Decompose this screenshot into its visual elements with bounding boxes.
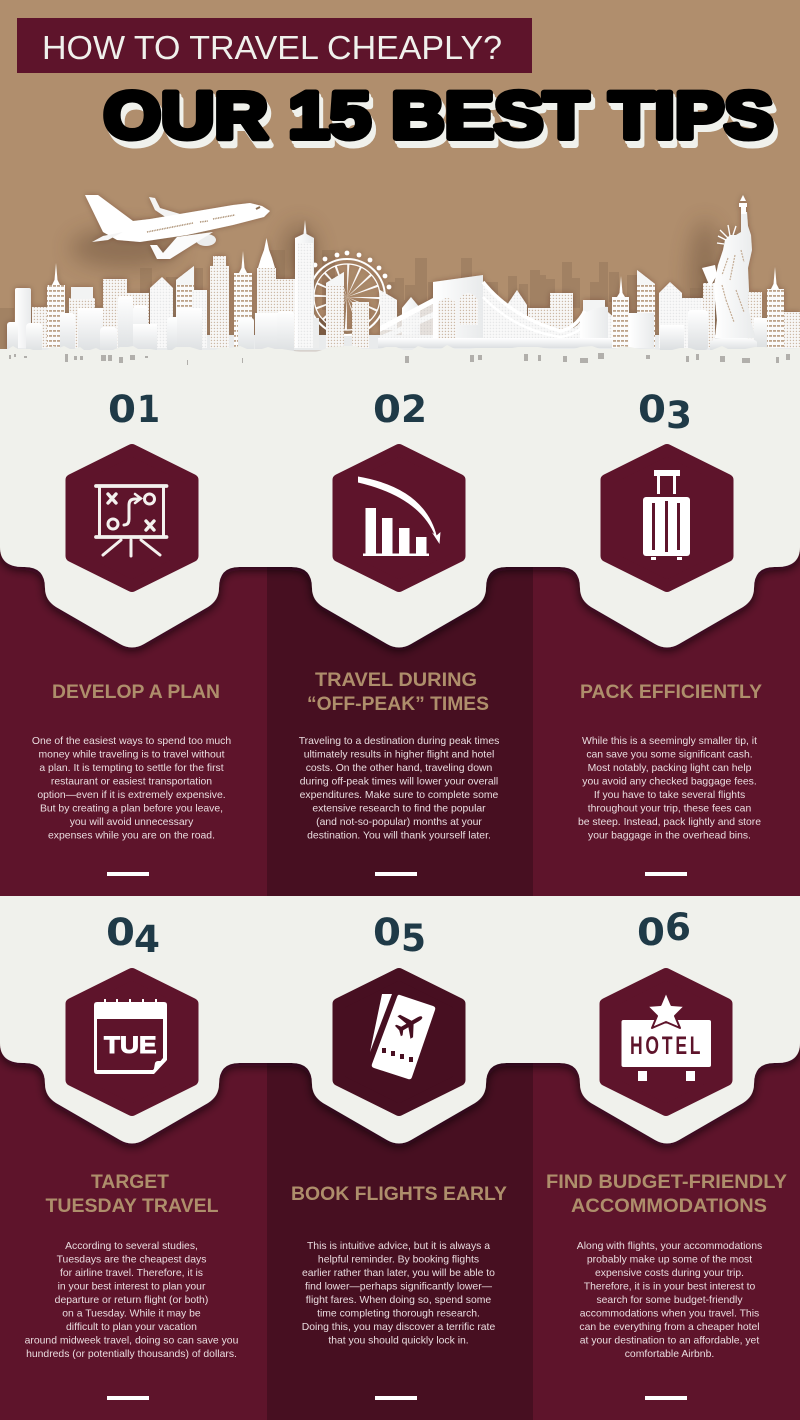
bridge xyxy=(378,275,634,348)
mid towers xyxy=(295,220,605,348)
divider bar xyxy=(645,872,687,876)
panel: light band row 1 with notches xyxy=(0,350,800,648)
title banner xyxy=(17,18,532,73)
body text: option—even if it is extremely expensive. xyxy=(37,790,226,801)
number 01: 0 xyxy=(108,388,136,431)
body text xyxy=(299,736,499,842)
tip 06 xyxy=(546,906,787,1400)
body text: at your destination to an affordable, yet xyxy=(580,1336,759,1346)
icon: calendar xyxy=(94,999,167,1074)
icon: falling prices chart xyxy=(358,476,440,556)
number 02 xyxy=(373,388,427,431)
houses row xyxy=(0,345,800,365)
number 04 xyxy=(106,911,160,961)
divider bar xyxy=(107,872,149,876)
hexagon 01 xyxy=(72,450,192,586)
body text: flight fares. When doing so, spend some xyxy=(306,1295,491,1306)
back towers left xyxy=(7,238,800,350)
body text xyxy=(25,1241,239,1360)
body text: in your best interest to plan your xyxy=(58,1282,206,1292)
main heading: OUR 15 BEST TIPS xyxy=(106,82,775,156)
body text: find lower—perhaps significantly lower— xyxy=(305,1282,493,1292)
heading: DEVELOP A PLAN xyxy=(52,682,220,703)
heading: TRAVEL DURING xyxy=(315,670,477,691)
body text: Most notably, packing light can help xyxy=(588,763,752,774)
divider bar xyxy=(375,1396,417,1400)
tip 01 xyxy=(32,388,231,876)
icon: hotel sign xyxy=(622,992,711,1081)
number 06 xyxy=(637,906,691,954)
divider bar xyxy=(375,872,417,876)
body text: earlier rather than later, you will be able to xyxy=(302,1268,495,1279)
body text: expenses while you are on the road. xyxy=(48,830,215,842)
body text: Along with flights, your accommodations xyxy=(577,1241,762,1252)
body text xyxy=(32,736,231,842)
background soft shadows xyxy=(70,220,721,340)
hexagon 05 xyxy=(338,974,460,1110)
heading: BOOK FLIGHTS EARLY xyxy=(291,1184,507,1205)
body text: search for some budget-friendly xyxy=(596,1295,743,1306)
right towers xyxy=(612,267,800,348)
body text: can save you some significant cash. xyxy=(586,750,753,760)
number 03: 3 xyxy=(666,394,692,437)
body text: costs. On the other hand, traveling down xyxy=(306,763,492,774)
number 05: 0 xyxy=(373,911,401,954)
heading: PACK EFFICIENTLY xyxy=(580,682,762,703)
header background xyxy=(0,0,800,362)
number 06: 0 xyxy=(637,911,665,954)
icon: suitcase xyxy=(643,470,690,560)
tip 03 xyxy=(578,388,762,876)
main heading: OUR 15 BEST TIPS xyxy=(108,85,777,159)
panel: light band row 2 with notches xyxy=(0,1030,800,1152)
body text: Therefore, it is in your best interest to xyxy=(584,1282,755,1292)
body text: Doing this, you may discover a terrific rate xyxy=(302,1322,495,1333)
body text: While this is a seemingly smaller tip, it xyxy=(582,736,757,747)
body text: helpful reminder. By booking flights xyxy=(318,1254,479,1266)
hexagon 03 xyxy=(606,450,728,586)
ferris wheel xyxy=(309,251,391,335)
body text: This is intuitive advice, but it is always a xyxy=(307,1241,490,1252)
body text: probably make up some of the most xyxy=(587,1254,752,1266)
body text: difficult to plan your vacation xyxy=(66,1322,197,1333)
heading: TARGET xyxy=(91,1172,169,1193)
heading xyxy=(46,1172,219,1217)
wheel backing shade xyxy=(318,318,342,346)
body text: destination. You will thank yourself later. xyxy=(307,830,491,842)
airplane xyxy=(85,195,270,259)
tip 05 xyxy=(291,911,507,1400)
icon: strategy board xyxy=(96,486,166,556)
house windows xyxy=(9,353,790,365)
body text: that you should quickly lock in. xyxy=(328,1336,469,1346)
heading: “OFF-PEAK” TIMES xyxy=(307,694,489,715)
heading xyxy=(307,670,489,715)
body text: Traveling to a destination during peak times xyxy=(299,736,499,747)
body text: around midweek travel, doing so can save you xyxy=(25,1336,239,1346)
body text: departure or return flight (or both) xyxy=(55,1295,208,1306)
divider bar xyxy=(107,1396,149,1400)
body text: (and not-so-popular) months at your xyxy=(316,817,482,828)
body text: accommodations when you travel. This xyxy=(580,1308,759,1320)
hexagon 06 xyxy=(606,974,726,1110)
main heading: OUR 15 BEST TIPS xyxy=(104,78,773,152)
number 06: 6 xyxy=(665,906,691,949)
panel: maroon columns row 1 xyxy=(0,540,800,896)
body text: time completing thorough research. xyxy=(317,1308,480,1320)
icon: hotel sign: HOTEL xyxy=(630,1031,703,1060)
heading: TUESDAY TRAVEL xyxy=(46,1196,219,1217)
body text xyxy=(578,736,761,842)
hexagon 04 xyxy=(72,974,192,1110)
icon: plane ticket xyxy=(370,994,435,1079)
number 02: 2 xyxy=(401,388,427,431)
body text: for airline travel. Therefore, it is xyxy=(60,1268,203,1279)
statue of liberty xyxy=(702,195,757,350)
skyline: city paper-cut xyxy=(7,195,800,353)
body text: expenditures. Make sure to complete some xyxy=(300,790,499,801)
panel: maroon columns row 2 xyxy=(0,1030,800,1420)
body text: you avoid any checked baggage fees. xyxy=(582,776,757,788)
number 03: 0 xyxy=(638,388,666,431)
body text xyxy=(302,1241,495,1346)
body text xyxy=(577,1241,762,1360)
number 05 xyxy=(373,911,426,960)
front rounded blocks xyxy=(7,296,708,353)
tip 04 xyxy=(25,911,239,1400)
number 02: 0 xyxy=(373,388,401,431)
heading: ACCOMMODATIONS xyxy=(571,1196,767,1217)
body text: you will avoid unnecessary xyxy=(70,817,194,828)
divider bar xyxy=(645,1396,687,1400)
body text: Tuesdays are the cheapest days xyxy=(57,1254,206,1266)
body text: One of the easiest ways to spend too much xyxy=(32,736,231,747)
body text: ultimately results in higher flight and hotel xyxy=(304,750,494,760)
number 04: 0 xyxy=(106,911,135,954)
body text: According to several studies, xyxy=(65,1241,198,1252)
title banner: HOW TO TRAVEL CHEAPLY? xyxy=(42,30,502,67)
heading xyxy=(546,1172,787,1217)
body text: comfortable Airbnb. xyxy=(625,1349,714,1360)
body text: But by creating a plan before you leave, xyxy=(40,804,223,814)
number 01: 1 xyxy=(137,388,160,431)
body text: during off-peak times will lower your overall xyxy=(300,776,498,788)
body text: money while traveling is to travel without xyxy=(39,750,225,760)
body text: hundreds (or potentially thousands) of dollars. xyxy=(26,1349,237,1360)
body text: can be everything from a cheaper hotel xyxy=(579,1322,760,1333)
icon: calendar: TUE xyxy=(104,1032,156,1059)
tip 02 xyxy=(299,388,499,876)
number 05: 5 xyxy=(401,917,426,960)
hexagon 02 xyxy=(338,450,460,586)
body text: extensive research to find the popular xyxy=(312,804,486,814)
body text: If you have to take several flights xyxy=(594,790,745,801)
skyline silhouettes xyxy=(0,250,702,350)
body text: restaurant or easiest transportation xyxy=(51,776,212,788)
body text: a plan. It is tempting to settle for the first xyxy=(39,763,224,774)
number 01 xyxy=(108,388,160,431)
body text: on a Tuesday. While it may be xyxy=(62,1308,201,1320)
number 03 xyxy=(638,388,692,437)
body text: your baggage in the overhead bins. xyxy=(588,830,751,842)
body text: be steep. Instead, pack lightly and store xyxy=(578,817,761,828)
number 04: 4 xyxy=(134,918,160,961)
heading: FIND BUDGET-FRIENDLY xyxy=(546,1172,787,1193)
body text: throughout your trip, these fees can xyxy=(588,804,751,814)
body text: expensive costs during your trip. xyxy=(595,1268,744,1279)
